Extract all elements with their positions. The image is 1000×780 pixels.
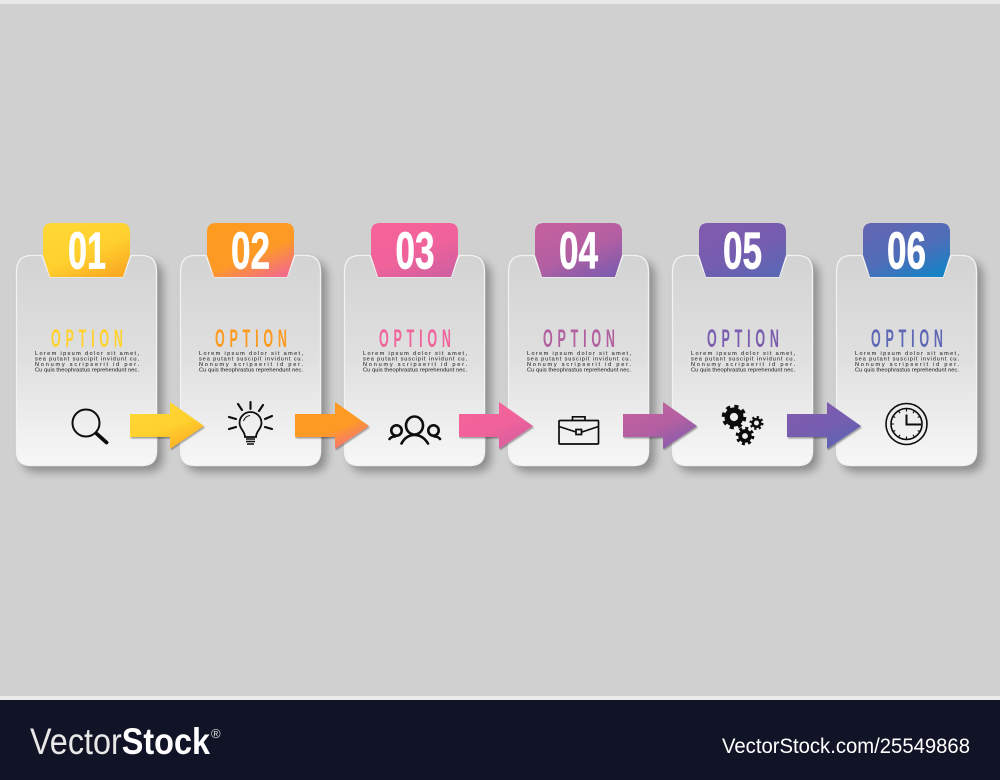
tab: number 04: 04 [559,222,598,280]
text block [199,351,303,374]
panel: step 05 [672,222,812,466]
tab: number 05 [699,222,786,280]
text block: sea putant suscipit invidunt cu. [527,357,631,363]
text block [527,351,631,374]
text block: Cu quis theophrastus reprehendunt nec. [35,368,139,374]
arrow: 02 to 03 [295,402,369,449]
text block: Lorem ipsum dolor sit amet, [363,351,467,357]
tab: number 01 [43,222,130,280]
text block: Lorem ipsum dolor sit amet, [691,351,795,357]
logo: VectorStock: VectorStock [30,721,210,762]
icon: briefcase [559,417,598,444]
tab: number 02: 02 [231,222,270,280]
text block: Cu quis theophrastus reprehendunt nec. [527,368,631,374]
text block [35,351,139,374]
heading: OPTION: OPTION [51,325,128,353]
text block: Cu quis theophrastus reprehendunt nec. [855,368,959,374]
heading: OPTION: OPTION [871,325,948,353]
arrow: 04 to 05 [623,402,697,449]
panel: step 04 [508,222,648,466]
heading: OPTION: OPTION [707,325,784,353]
text block: Nonumy scripserit id per. [527,362,631,368]
tab: number 03 [371,222,458,280]
icon: group of people [390,416,440,444]
text block: Nonumy scripserit id per. [363,362,467,368]
text block: sea putant suscipit invidunt cu. [363,357,467,363]
arrow: 05 to 06 [787,402,861,449]
text block: Lorem ipsum dolor sit amet, [855,351,959,357]
text block: Cu quis theophrastus reprehendunt nec. [691,368,795,374]
text block [363,351,467,374]
heading: OPTION: OPTION [215,325,292,353]
arrow: 01 to 02 [130,402,204,449]
icon: magnifying glass [72,410,106,442]
text block: sea putant suscipit invidunt cu. [35,357,139,363]
panel: step 01 [16,222,156,466]
logo: VectorStock: ® [211,726,221,741]
text block: sea putant suscipit invidunt cu. [199,357,303,363]
tab: number 04 [535,222,622,280]
text block: Nonumy scripserit id per. [855,362,959,368]
tab: number 02 [207,222,294,280]
text block: Nonumy scripserit id per. [691,362,795,368]
panel: step 03 [344,222,484,466]
text block: Lorem ipsum dolor sit amet, [35,351,139,357]
text block: Cu quis theophrastus reprehendunt nec. [199,368,303,374]
text block: Cu quis theophrastus reprehendunt nec. [363,368,467,374]
footer bar [0,700,1000,780]
text block [691,351,795,374]
text block: sea putant suscipit invidunt cu. [691,357,795,363]
text block: Lorem ipsum dolor sit amet, [527,351,631,357]
heading: OPTION: OPTION [379,325,456,353]
panel: step 02 [180,222,320,466]
text block: sea putant suscipit invidunt cu. [855,357,959,363]
image id: VectorStock.com/25549868 [722,735,970,758]
text block: Nonumy scripserit id per. [35,362,139,368]
heading: OPTION: OPTION [543,325,620,353]
tab: number 05: 05 [723,222,762,280]
text block: Nonumy scripserit id per. [199,362,303,368]
text block [855,351,959,374]
tab: number 03: 03 [396,222,434,280]
arrow: 03 to 04 [459,402,533,449]
tab: number 06: 06 [887,222,926,280]
panel: step 06 [836,222,976,466]
tab: number 06 [863,222,950,280]
icon: gears [724,406,762,444]
tab: number 01: 01 [68,222,106,280]
text block: Lorem ipsum dolor sit amet, [199,351,303,357]
icon: light bulb [229,402,272,444]
icon: clock [886,404,927,444]
